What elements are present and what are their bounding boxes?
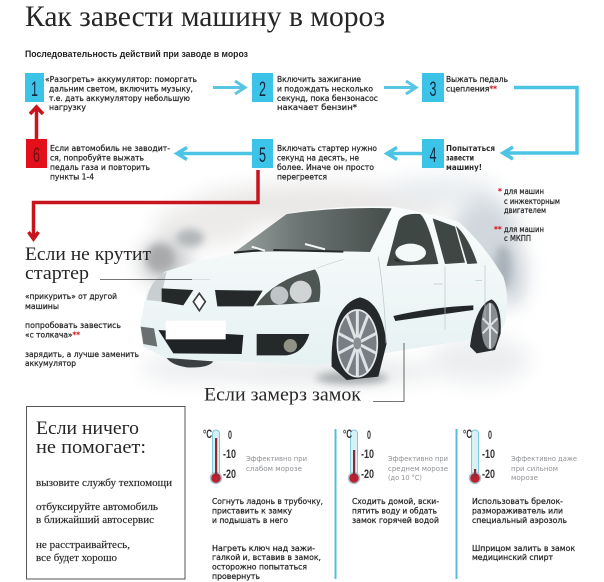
- divider 1: [334, 429, 336, 579]
- thermometer: weak frost: 0: [228, 428, 232, 442]
- wing mirror: [393, 244, 426, 262]
- column: medium frost: Сходить домой, вски-: [352, 497, 439, 506]
- list: starter tips: машины: [25, 302, 59, 311]
- column: weak frost: и подышать в него: [212, 516, 288, 525]
- step 1: дальним светом, включить музыку,: [49, 84, 193, 94]
- footnotes: двигателем: [504, 206, 546, 215]
- thermometer: strong frost: -10: [482, 447, 495, 461]
- panel: if nothing helps: в ближайший автосервис: [36, 515, 154, 526]
- thermometer: weak frost: -20: [223, 467, 236, 481]
- leader line: frozen lock: [373, 343, 404, 402]
- panel: if nothing helps: Если ничего: [36, 418, 139, 439]
- step 3: [422, 73, 508, 102]
- column: weak frost: приставить к замку: [212, 506, 292, 516]
- column: weak frost: Нагреть ключ над зажи-: [212, 544, 315, 553]
- step 5: перегреется: [277, 172, 327, 182]
- list: starter tips: «прикурить» от другой: [25, 292, 117, 301]
- licence plate: [166, 321, 226, 339]
- subtitle: Последовательность действий при заводе в мороз: [25, 49, 248, 59]
- column: strong frost: Эффективно даже: [511, 455, 577, 463]
- thermometer: weak frost: °С: [203, 427, 212, 441]
- panel: if nothing helps: не расстраивайтесь,: [36, 540, 130, 551]
- arrow: 4 to 5: [387, 148, 422, 160]
- arrow: 1 to 2: [213, 81, 245, 94]
- front wheel: [332, 297, 387, 380]
- arrow: 2 to 3: [384, 81, 416, 94]
- door lines: [378, 257, 485, 343]
- step 5: секунд на десять, не: [277, 154, 359, 162]
- heading: starter: [25, 245, 151, 284]
- photo: winter background: [140, 176, 530, 384]
- side windows: [387, 214, 477, 266]
- panel: if nothing helps: [26, 406, 185, 579]
- thermometer: strong frost: 0: [488, 428, 492, 442]
- thermometer: medium frost: [343, 427, 374, 484]
- arrow: 5 to starter section: [28, 170, 258, 239]
- step 1: «Разогреть» аккумулятор: поморгать: [45, 75, 197, 84]
- title: Как завести машину в мороз: [25, 0, 385, 33]
- heading: frozen lock: Если замерз замок: [204, 386, 361, 406]
- footnotes: для машин: [504, 187, 544, 196]
- step 6: пункты 1-4: [50, 172, 94, 182]
- step 1: т.е. дать аккумулятору небольшую: [49, 94, 191, 103]
- column: strong frost: при сильном: [511, 465, 558, 473]
- column: medium frost: Эффективно при: [388, 455, 448, 463]
- panel: if nothing helps: не помогает:: [36, 437, 146, 458]
- thermometer: medium frost: 0: [367, 428, 371, 442]
- windshield: [234, 208, 392, 253]
- step 5: 5: [259, 143, 266, 167]
- column: strong frost: размораживатель или: [472, 506, 563, 516]
- car photo: [140, 206, 507, 380]
- thermometer: weak frost: -10: [223, 447, 236, 461]
- thermometer: weak frost: [203, 427, 236, 484]
- column: weak frost: слабом морозе: [246, 465, 302, 473]
- hood crease: [165, 259, 343, 279]
- column: strong frost: Шприцом залить в замок: [472, 544, 575, 553]
- column: medium frost: замок горячей водой: [352, 516, 439, 525]
- column: weak frost: галкой и, вставив в замок,: [212, 553, 321, 562]
- list: starter tips: аккумулятор: [25, 359, 76, 368]
- column: weak frost: [203, 427, 323, 581]
- thermometer: strong frost: -20: [482, 467, 495, 481]
- side strip: [393, 305, 473, 321]
- rear wheel: [470, 299, 501, 353]
- panel: if nothing helps: все будет хорошо: [36, 553, 117, 564]
- step 2: 2: [259, 77, 266, 101]
- renault logo: [193, 293, 205, 311]
- step 4: Попытаться: [446, 144, 495, 153]
- step 5: Включать стартер нужно: [277, 144, 377, 153]
- arrow: 5 to 6: [177, 148, 252, 160]
- fog lamp housing: [257, 334, 309, 355]
- step 5: более. Иначе он просто: [277, 163, 374, 172]
- thermometer: medium frost: -20: [361, 467, 374, 481]
- footnotes: для машин: [504, 225, 544, 234]
- step 6: педаль газа и повторить: [50, 163, 150, 172]
- column: strong frost: медицинский спирт: [472, 553, 554, 562]
- step 3: Выжать педаль: [446, 75, 508, 84]
- upper grille: [162, 288, 263, 306]
- list: starter tips: зарядить, а лучше заменить: [25, 350, 139, 359]
- footnotes: с инжекторным: [504, 197, 560, 206]
- step 6: ся, попробуйте выжать: [50, 154, 144, 162]
- wipers: [234, 244, 343, 253]
- lower grille: [158, 330, 243, 354]
- thermometer: medium frost: -10: [361, 447, 374, 461]
- column: weak frost: Согнуть ладонь в трубочку,: [212, 497, 323, 506]
- panel: if nothing helps: отбуксируйте автомобиль: [36, 502, 158, 513]
- column: strong frost: морозе: [511, 474, 538, 482]
- column: weak frost: провернуть: [212, 572, 260, 581]
- left headlight: [147, 272, 167, 302]
- footnotes: *: [498, 187, 502, 196]
- thermometer: medium frost: °С: [343, 427, 352, 441]
- left bumper vent: [141, 327, 157, 347]
- step 5: [252, 139, 377, 182]
- divider 2: [456, 429, 458, 579]
- step 6: Если автомобиль не заводит-: [50, 144, 170, 153]
- column: weak frost: Эффективно при: [246, 455, 307, 463]
- footnotes: с МКПП: [504, 234, 531, 243]
- leader line: starter: [100, 278, 192, 280]
- step 1: [25, 73, 197, 112]
- arrow: 6 to 1: [30, 107, 43, 139]
- step 4: завести: [446, 154, 474, 162]
- step 3: 3: [429, 77, 437, 101]
- step 6: 6: [33, 143, 40, 167]
- list: starter tips: «с толкача»**: [25, 330, 80, 340]
- panel: if nothing helps: вызовите службу техпомощи: [36, 478, 172, 489]
- front chin shadow: [167, 358, 213, 367]
- step 2: Включить зажигание: [277, 75, 361, 84]
- list: starter tips: попробовать завестись: [25, 321, 121, 330]
- step 2: [252, 73, 378, 112]
- step 2: секунд, пока бензонасос: [277, 94, 378, 103]
- footnotes: [494, 187, 560, 243]
- step 1: нагрузку: [49, 103, 86, 112]
- column: strong frost: [463, 427, 577, 562]
- step 4: машину!: [446, 163, 482, 172]
- column: weak frost: осторожно попытаться: [212, 562, 307, 572]
- step 1: 1: [31, 77, 38, 101]
- column: medium frost: пятить воду и обдать: [352, 506, 437, 516]
- step 2: накачает бензин*: [277, 103, 357, 112]
- right headlight: [256, 269, 320, 305]
- column: medium frost: среднем морозе: [388, 465, 448, 473]
- column: medium frost: (до 10 °С): [388, 474, 422, 482]
- column: strong frost: специальный аэрозоль: [472, 516, 567, 525]
- footnotes: **: [494, 225, 502, 234]
- step 3: сцепления**: [446, 84, 497, 94]
- thermometer: strong frost: °С: [463, 427, 472, 441]
- thermometer: strong frost: [463, 427, 495, 484]
- step 2: и подождать несколько: [277, 84, 373, 94]
- step 6: [26, 139, 170, 182]
- arrow: 3 to 4: [503, 88, 577, 159]
- column: medium frost: [343, 427, 448, 525]
- car body: [140, 206, 507, 365]
- heading: starter: стартер: [25, 264, 89, 284]
- step 4: 4: [429, 143, 437, 167]
- heading: starter: Если не крутит: [25, 245, 151, 265]
- column: strong frost: Использовать брелок-: [472, 497, 563, 506]
- list: starter tips: [25, 292, 139, 368]
- step 4: [422, 139, 495, 172]
